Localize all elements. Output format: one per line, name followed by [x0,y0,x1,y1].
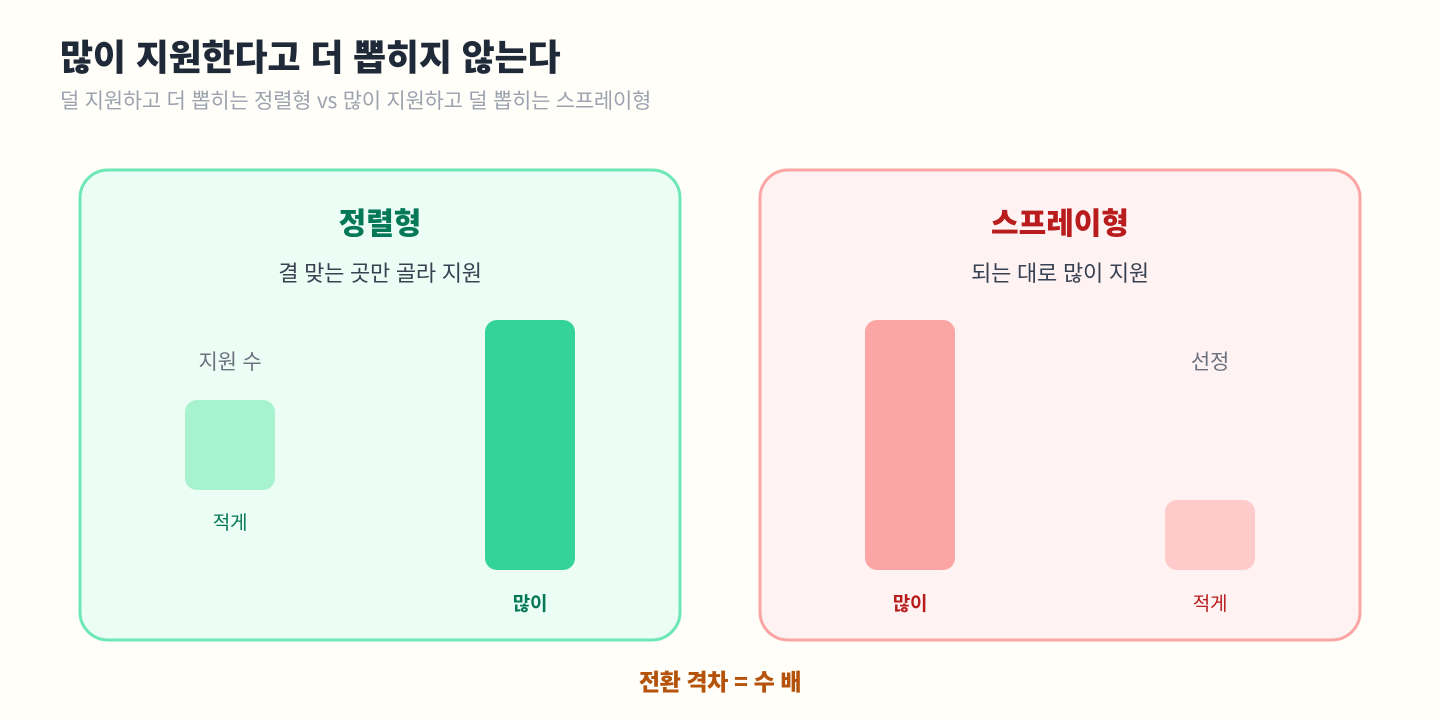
subtitle: 덜 지원하고 더 뽑히는 정렬형 vs 많이 지원하고 덜 뽑히는 스프레이형 [60,85,651,115]
bar: 선정 많이 [485,320,575,570]
footer note: 전환 격차 = 수 배 [639,663,801,697]
bar: 선정 적게 [1165,500,1255,570]
bar label: 많이: 많이 [513,589,547,616]
bar label: 적게: 적게 [213,508,247,535]
title: 많이 지원한다고 더 뽑히지 않는다 [60,29,560,81]
label: 지원 수: 지원 수 [198,346,262,376]
panel description: 결 맞는 곳만 골라 지원 [278,256,482,288]
bar: 지원 수 많이 [865,320,955,570]
label: 선정: 선정 [1191,346,1229,376]
panel heading: 정렬형: 정렬형 [339,199,421,243]
panel: 스프레이형 [760,170,1360,640]
panel: 정렬형 [80,170,680,640]
bar: 지원 수 적게 [185,400,275,490]
panel description: 되는 대로 많이 지원 [971,256,1149,288]
bar label: 많이: 많이 [893,589,927,616]
panel heading: 스프레이형: 스프레이형 [991,199,1129,243]
bar label: 적게: 적게 [1193,589,1227,616]
